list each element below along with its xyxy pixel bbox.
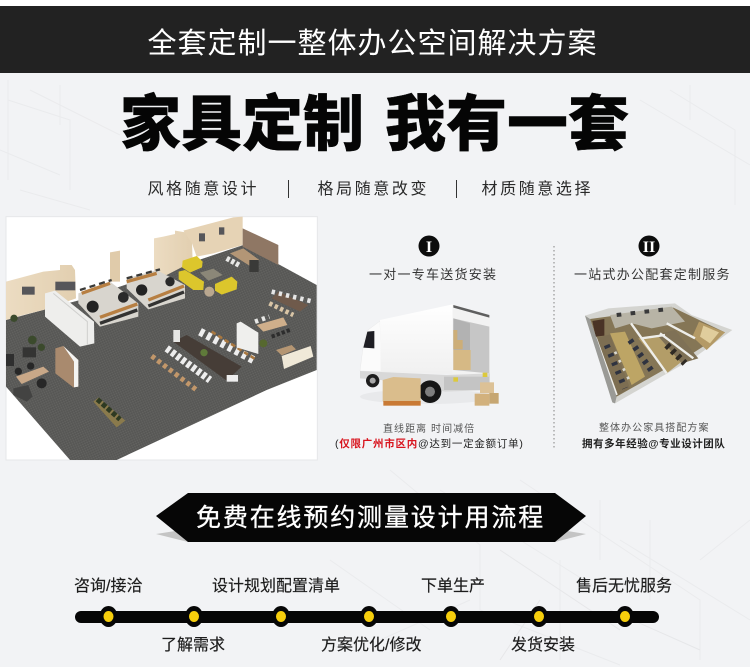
planter — [93, 397, 125, 427]
process ribbon — [156, 493, 586, 542]
banner heading: 全套定制一整体办公空间解决方案 — [148, 27, 598, 60]
main title: 家具定制 — [120, 90, 364, 158]
delivery heading: 一对一专车送货安装 — [369, 267, 497, 282]
numeral badge I: I — [426, 239, 432, 256]
timeline labels: 方案优化/修改 — [321, 636, 421, 654]
cubicles — [78, 269, 185, 327]
ribbon heading: 免费在线预约测量设计用流程 — [196, 504, 545, 532]
service caption: 整体办公家具搭配方案 — [599, 421, 710, 434]
service heading: 一站式办公配套定制服务 — [574, 267, 731, 282]
conference table — [173, 335, 242, 381]
subtitle row: 材质随意选择 — [482, 179, 593, 198]
delivery caption: 直线距离 时间减倍 — [383, 422, 475, 435]
back meeting desk — [230, 248, 259, 266]
numeral badge II: II — [643, 239, 655, 256]
timeline labels: 设计规划配置清单 — [212, 577, 340, 595]
timeline labels: 发货安装 — [511, 636, 575, 654]
right white panel — [237, 322, 258, 354]
service note: 拥有多年经验@专业设计团队 — [582, 437, 725, 450]
delivery note: (仅限广州市区内@达到一定金额订单) — [335, 437, 524, 450]
timeline labels: 售后无忧服务 — [576, 577, 672, 595]
timeline labels: 了解需求 — [161, 636, 225, 654]
office floor plan image — [6, 217, 317, 460]
column 1: delivery — [335, 236, 524, 450]
header banner — [0, 6, 750, 73]
carpet floor — [6, 245, 317, 460]
wood panel — [55, 346, 78, 387]
process timeline — [74, 577, 672, 654]
main title — [120, 90, 629, 158]
truck illustration — [360, 304, 499, 406]
timeline labels: 下单生产 — [421, 577, 485, 595]
timeline nodes — [100, 606, 634, 627]
subtitle row: 格局随意改变 — [318, 179, 429, 198]
subtitle row — [148, 179, 593, 198]
3D office plan — [585, 303, 732, 403]
timeline bar — [75, 611, 659, 623]
subtitle row: 风格随意设计 — [148, 179, 259, 198]
numeral badge II — [638, 236, 660, 256]
white partition — [45, 291, 94, 347]
numeral badge I — [418, 236, 440, 256]
yellow sofas — [179, 256, 237, 295]
main title: 我有一套 — [385, 90, 629, 158]
left reception — [6, 315, 49, 402]
right tables — [255, 292, 313, 369]
timeline labels — [74, 577, 672, 654]
column 2: one-stop service — [574, 236, 732, 450]
walls — [6, 217, 278, 320]
dotted divider — [553, 246, 555, 450]
timeline labels: 咨询/接洽 — [74, 577, 142, 595]
